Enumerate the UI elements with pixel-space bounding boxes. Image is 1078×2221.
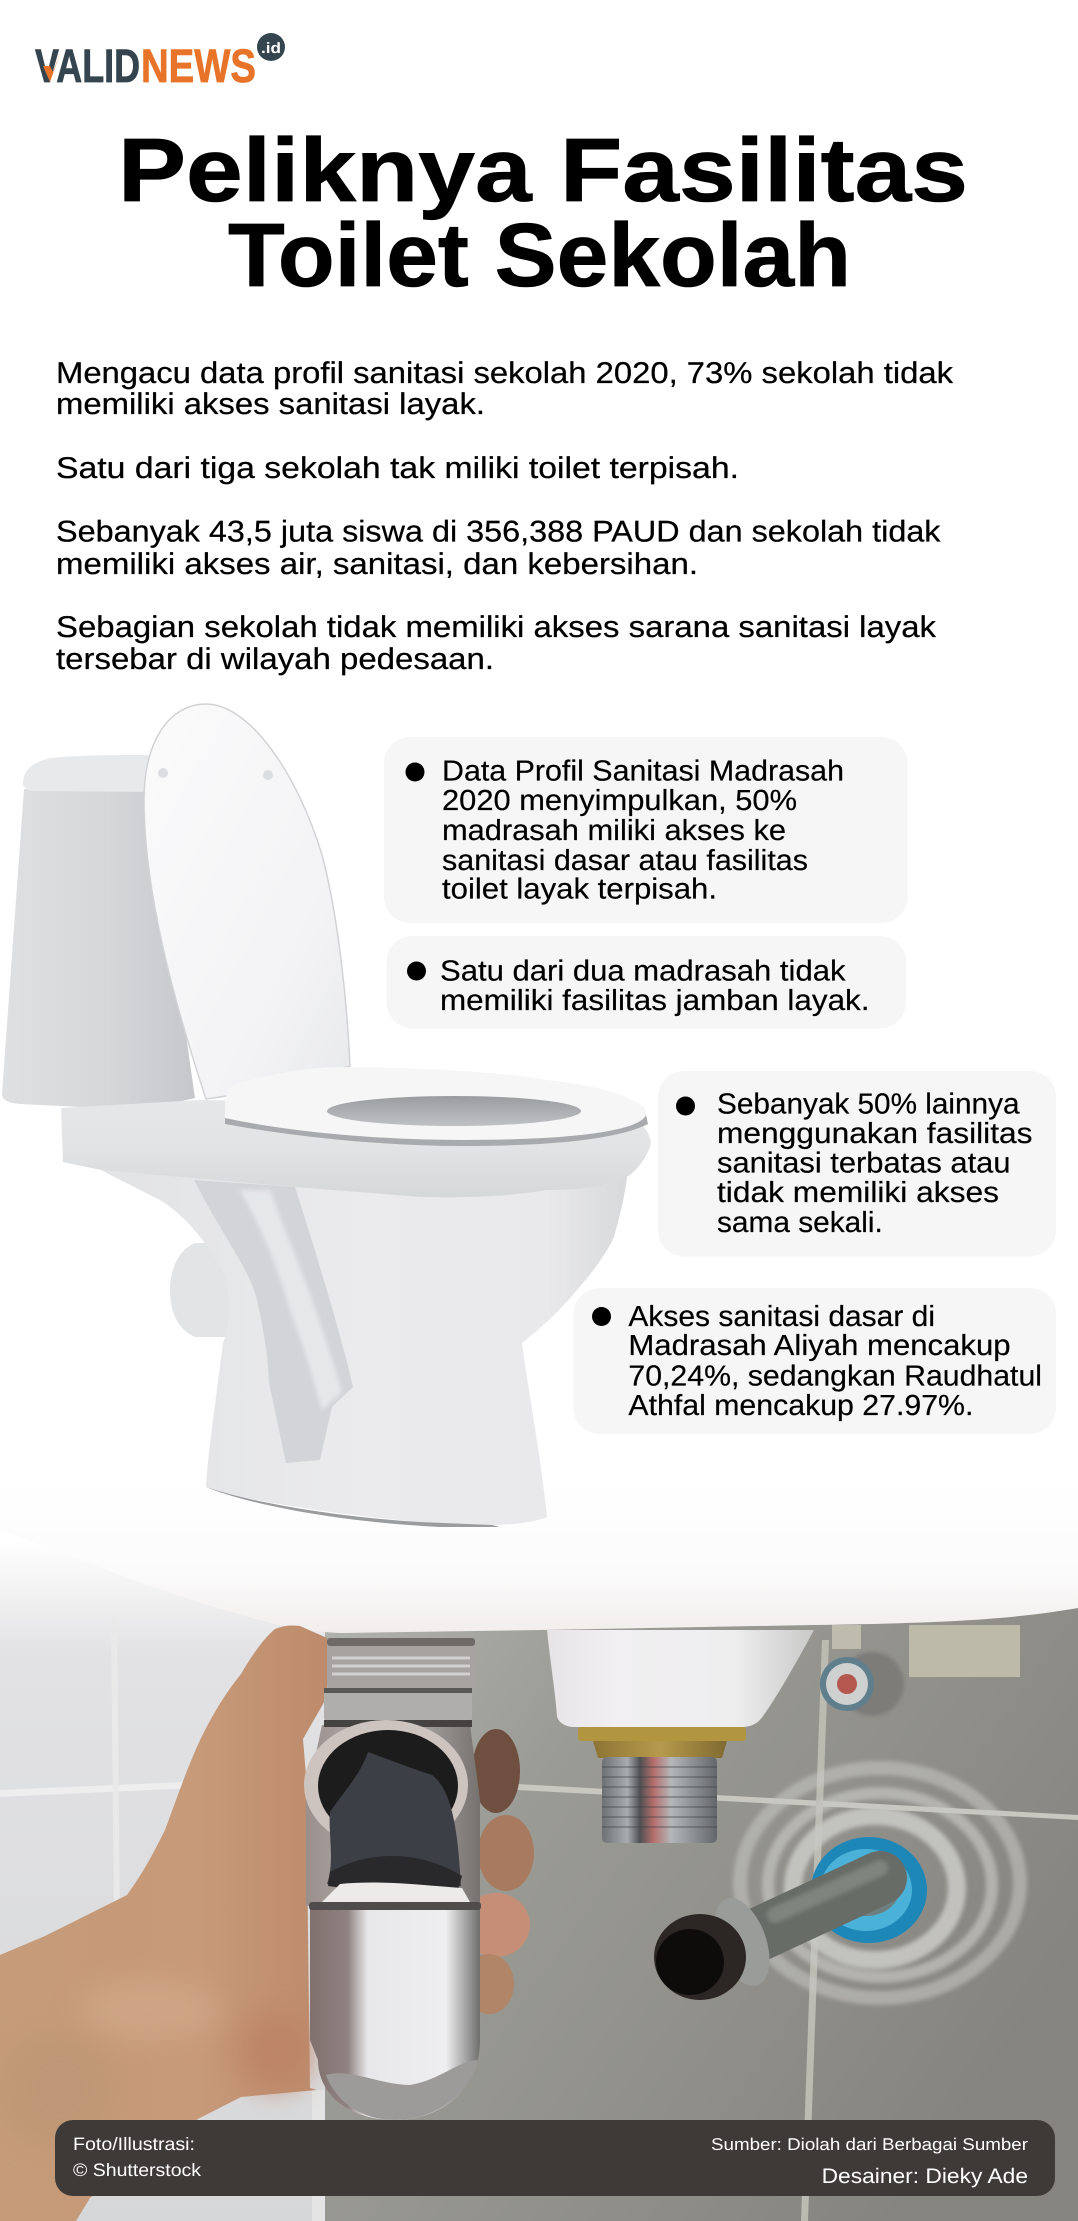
- intro text: memiliki akses air, sanitasi, dan kebersihan.: [56, 548, 698, 581]
- callout 1: 2020 menyimpulkan, 50%: [442, 785, 797, 817]
- raised seat lid: [144, 704, 350, 1099]
- source and designer: [711, 2135, 1028, 2188]
- callout 1: [384, 737, 908, 923]
- callout 3: tidak memiliki akses: [717, 1177, 999, 1209]
- sink basin: [0, 1480, 1078, 1633]
- title: Peliknya Fasilitas: [118, 121, 968, 221]
- callout 3: sanitasi terbatas atau: [717, 1148, 1010, 1180]
- title: [118, 121, 968, 306]
- source bar: [55, 2120, 1055, 2196]
- logo: [35, 33, 285, 92]
- intro text: tersebar di wilayah pedesaan.: [56, 643, 494, 676]
- intro text: [56, 357, 954, 676]
- callout 4: 70,24%, sedangkan Raudhatul: [628, 1360, 1042, 1392]
- callout 2: [386, 936, 906, 1028]
- rear pipe: [170, 1243, 230, 1337]
- tank lid: [23, 755, 157, 792]
- callout 4: Madrasah Aliyah mencakup: [628, 1330, 1011, 1362]
- hand: [0, 1625, 327, 2221]
- source and designer: Desainer: Dieky Ade: [822, 2165, 1028, 2188]
- callout 2: Satu dari dua madrasah tidak: [440, 956, 846, 988]
- sludge clog: [327, 1752, 461, 1889]
- photo credit: © Shutterstock: [73, 2160, 202, 2180]
- seat hole: [327, 1096, 581, 1126]
- callout 3: Sebanyak 50% lainnya: [717, 1088, 1020, 1120]
- wall box and gauge: [820, 1625, 1020, 1716]
- callout 4: Akses sanitasi dasar di: [628, 1301, 935, 1333]
- intro text: Sebagian sekolah tidak memiliki akses sarana sanitasi layak: [56, 611, 937, 644]
- callout 1: sanitasi dasar atau fasilitas: [442, 845, 808, 877]
- intro text: Mengacu data profil sanitasi sekolah 2020, 73% sekolah tidak: [56, 357, 954, 390]
- pedestal and bowl: [101, 1170, 627, 1525]
- callout 1: madrasah miliki akses ke: [442, 815, 786, 847]
- photo credit: Foto/Illustrasi:: [73, 2134, 195, 2154]
- intro text: Sebanyak 43,5 juta siswa di 356,388 PAUD dan sekolah tidak: [56, 516, 942, 548]
- callout 1: toilet layak terpisah.: [442, 874, 717, 906]
- photo credit: [73, 2134, 202, 2180]
- intro text: Satu dari tiga sekolah tak miliki toilet terpisah.: [56, 452, 739, 485]
- callout 4: Athfal mencakup 27.97%.: [628, 1390, 973, 1422]
- seat ring: [225, 1067, 646, 1142]
- callout 2: memiliki fasilitas jamban layak.: [440, 985, 870, 1017]
- rim: [61, 1100, 651, 1197]
- wall pipe with blue ring: [654, 1768, 1020, 2000]
- callout 4: [574, 1288, 1056, 1434]
- title: Toilet Sekolah: [228, 206, 851, 306]
- logo: .id: [261, 40, 281, 57]
- bowl channel shading: [194, 1180, 353, 1463]
- fingers behind the pipe: [462, 1729, 534, 2014]
- callout 3: [658, 1071, 1056, 1256]
- toilet illustration: [2, 704, 651, 1527]
- logo: NEWS: [141, 39, 256, 92]
- sink drain outlet: [547, 1630, 814, 1843]
- callout 1: Data Profil Sanitasi Madrasah: [442, 756, 844, 788]
- chrome trap pipe: [304, 1638, 481, 2120]
- callout 3: menggunakan fasilitas: [717, 1118, 1032, 1150]
- callout 3: sama sekali.: [717, 1207, 883, 1239]
- source and designer: Sumber: Diolah dari Berbagai Sumber: [711, 2135, 1028, 2154]
- intro text: memiliki akses sanitasi layak.: [56, 388, 485, 421]
- tank: [2, 789, 195, 1110]
- logo: VALID: [35, 39, 140, 92]
